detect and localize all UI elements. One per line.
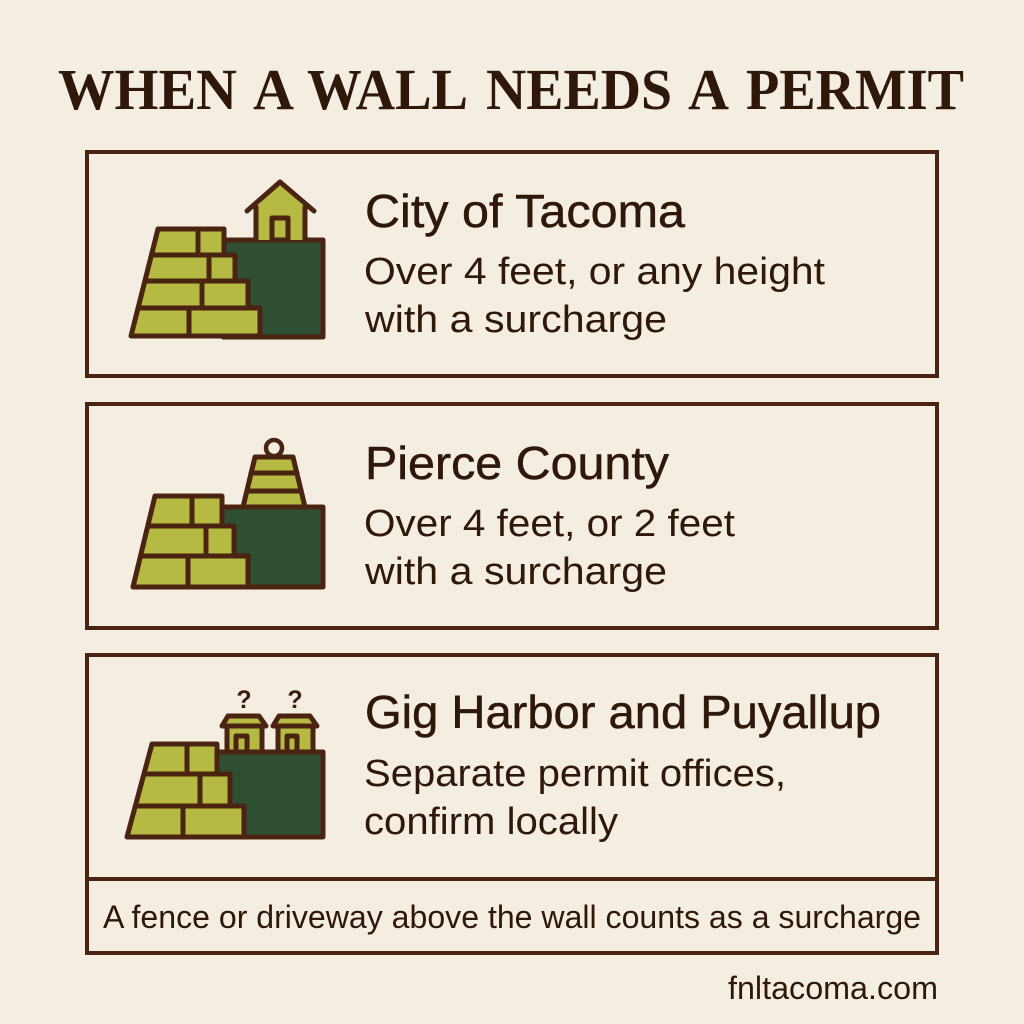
panel: City of Tacoma xyxy=(87,152,937,376)
text: Pierce County rule: Over 4 feet, or 2 feet xyxy=(364,503,735,545)
source credit: fnltacoma.com xyxy=(728,970,938,1006)
title: WHEN xyxy=(58,57,237,122)
title xyxy=(58,57,964,122)
text: Gig Harbor and Puyallup rule: confirm locally xyxy=(364,801,618,843)
heading: Pierce County: Pierce County xyxy=(365,437,669,489)
text: Tacoma rule: with a surcharge xyxy=(364,299,667,341)
text: Pierce County rule xyxy=(364,503,735,593)
title: NEEDS xyxy=(486,57,672,122)
text: surcharge note: A fence or driveway above the wall counts as a surcharge xyxy=(103,899,921,935)
text: Tacoma rule xyxy=(364,251,825,341)
text: Tacoma rule: Over 4 feet, or any height xyxy=(364,251,825,293)
icon: retaining wall with two houses xyxy=(127,686,323,837)
panel: Pierce County xyxy=(87,404,937,628)
text: Pierce County rule: with a surcharge xyxy=(364,551,667,593)
text: Gig Harbor and Puyallup rule: Separate permit offices, xyxy=(364,753,786,795)
title: WALL xyxy=(307,57,468,122)
icon: retaining wall with two houses: ? xyxy=(236,686,252,714)
heading: Gig Harbor and Puyallup: Gig Harbor and Puyallup xyxy=(365,686,881,738)
title: A xyxy=(688,57,729,122)
heading: City of Tacoma: City of Tacoma xyxy=(365,185,685,237)
text: Gig Harbor and Puyallup rule xyxy=(364,753,786,843)
title: PERMIT xyxy=(746,57,964,122)
icon: retaining wall with weight xyxy=(133,440,323,587)
icon: retaining wall with house xyxy=(131,182,323,337)
panel: Gig Harbor and Puyallup xyxy=(87,655,937,953)
title: A xyxy=(253,57,294,122)
icon: retaining wall with two houses: ? xyxy=(287,686,303,714)
